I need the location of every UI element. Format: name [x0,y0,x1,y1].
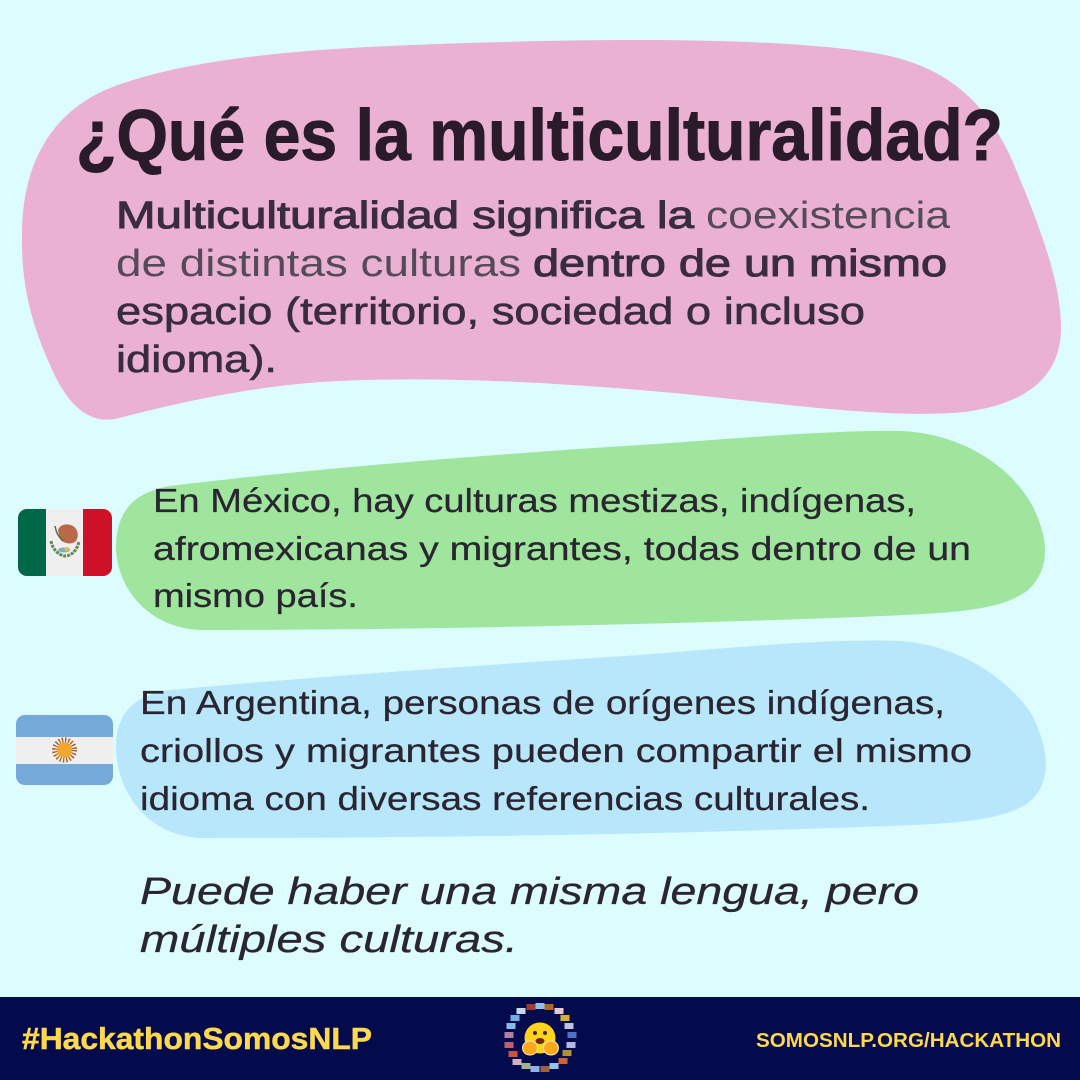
Argentina text: criollos y migrantes pueden compartir el mismo [140,732,972,769]
hashtag: #HackathonSomosNLP [22,1021,372,1056]
closing statement: Puede haber una misma lengua, pero [140,871,919,913]
definition text: de distintas culturas [116,243,521,285]
closing statement [140,871,919,961]
closing statement: múltiples culturas. [140,919,518,961]
Mexico text: mismo país. [153,577,358,614]
Argentina text [140,684,972,817]
Mexico text [153,482,971,614]
definition text: dentro de un mismo [533,243,947,285]
footer bar [0,997,1080,1080]
definition text [116,195,951,381]
icon: Argentine flag [16,715,113,785]
Argentina text: En Argentina, personas de orígenes indígenas, [140,684,945,721]
panel: Argentina example [116,640,1046,838]
definition text: espacio (territorio, sociedad o incluso [116,291,865,333]
definition text: coexistencia [706,195,951,237]
logo: flag ring and hugging face [504,1003,576,1072]
panel: definition [22,40,1061,420]
website: SOMOSNLP.ORG/HACKATHON [756,1030,1061,1052]
Argentina text: idioma con diversas referencias culturales. [140,780,870,817]
definition text: Multiculturalidad significa la [116,195,695,237]
Mexico text: afromexicanas y migrantes, todas dentro de un [153,530,971,567]
definition text: idioma). [116,339,277,381]
panel: Mexico example [116,431,1045,630]
Mexico text: En México, hay culturas mestizas, indígenas, [153,482,916,519]
heading: ¿Qué es la multiculturalidad? [76,96,1003,176]
icon: Mexican flag [18,509,112,576]
